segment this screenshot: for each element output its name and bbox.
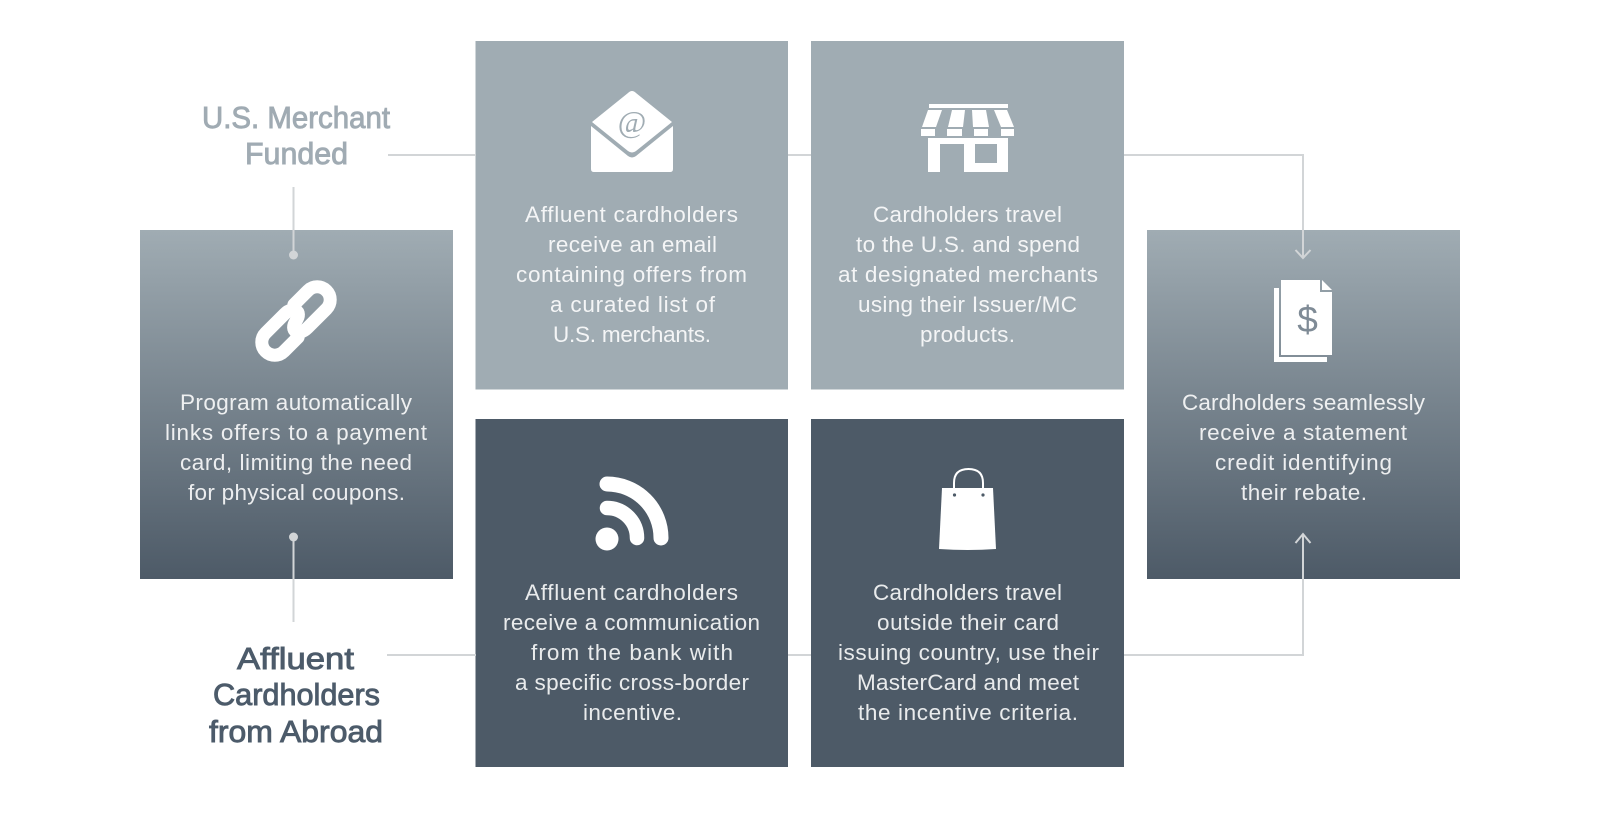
icon: dollar document: $ [1297,299,1318,340]
panel: statement credit [1147,230,1460,579]
text: incentive criteria description: the incentive criteria. [858,700,1078,725]
arrow: bottom row into statement panel [1124,534,1310,655]
text: communication description: receive a communication [503,610,760,635]
text: travel description: using their Issuer/MC [858,292,1077,317]
text: incentive criteria description: outside their card [877,610,1059,635]
text: program description [165,390,428,505]
text: incentive criteria description: Cardholders travel [873,580,1062,605]
text: email description: Affluent cardholders [525,202,738,227]
text: email description: containing offers from [516,262,747,287]
heading: U.S. Merchant Funded: Funded [245,136,348,171]
text: statement description: receive a statement [1199,420,1408,445]
text: travel description: Cardholders travel [873,202,1062,227]
icon: storefront [921,104,1014,172]
icon: wireless signal [596,484,661,550]
arrow: top row into statement panel [1124,155,1310,258]
panel: bank communication [476,419,788,767]
text: statement description: Cardholders seamlessly [1182,390,1426,415]
heading: U.S. Merchant Funded [202,100,390,171]
text: email description [516,202,747,347]
panel: program links offers [140,230,453,579]
text: communication description [503,580,760,725]
heading: Affluent Cardholders from Abroad: Cardholders [213,677,380,712]
text: communication description: a specific cross-border [515,670,750,695]
connector: merchant funded to panel [289,187,298,260]
text: email description: U.S. merchants. [553,322,711,347]
panel: travel outside issuing country [811,419,1124,767]
text: statement description [1182,390,1426,505]
text: communication description: from the bank with [531,640,733,665]
text: program description: for physical coupons. [188,480,405,505]
connector: affluent cardholders to panel [289,532,298,622]
text: email description: a curated list of [550,292,716,317]
text: communication description: Affluent cardholders [525,580,738,605]
text: statement description: their rebate. [1241,480,1367,505]
panel: email offers [476,41,788,390]
text: program description: Program automatically [180,390,413,415]
text: incentive criteria description: MasterCard and meet [857,670,1080,695]
panel: travel to the U.S. [811,41,1124,390]
icon: chain link [256,281,336,361]
heading: Affluent Cardholders from Abroad: Affluent [237,641,354,676]
text: incentive criteria description: issuing country, use their [838,640,1100,665]
icon: shopping bag [939,469,996,550]
icon: open envelope: @ [618,104,646,139]
icon: dollar document [1274,280,1332,362]
heading: Affluent Cardholders from Abroad [209,641,383,749]
text: incentive criteria description [838,580,1100,725]
text: travel description [838,202,1098,347]
text: travel description: products. [920,322,1015,347]
text: travel description: at designated merchants [838,262,1098,287]
text: travel description: to the U.S. and spend [856,232,1080,257]
connector: bottom row line [387,654,811,656]
text: email description: receive an email [548,232,717,257]
heading: U.S. Merchant Funded: U.S. Merchant [202,100,390,135]
text: program description: card, limiting the need [180,450,412,475]
heading: Affluent Cardholders from Abroad: from Abroad [209,714,383,749]
connector: top row line [388,154,811,156]
icon: open envelope [591,91,673,172]
text: statement description: credit identifying [1215,450,1392,475]
text: communication description: incentive. [583,700,682,725]
text: program description: links offers to a payment [165,420,428,445]
